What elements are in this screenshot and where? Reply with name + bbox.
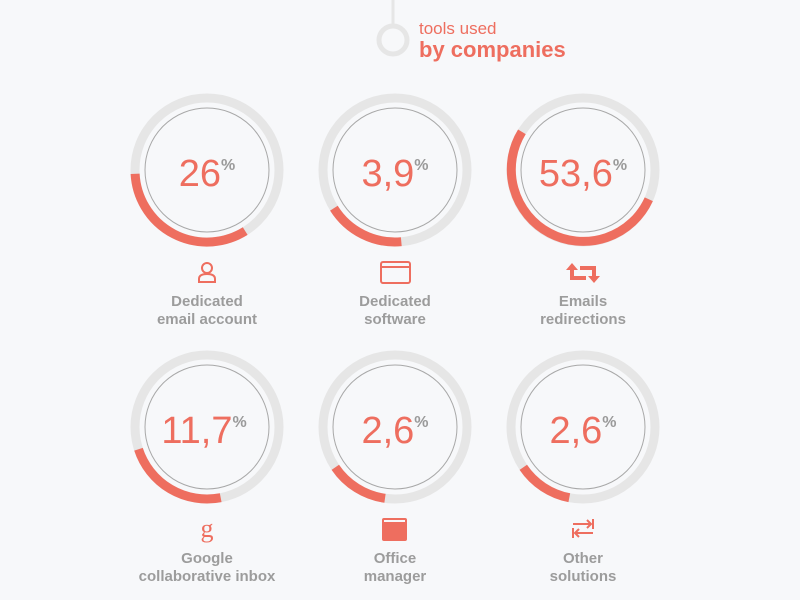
chart: dedicated software: [323, 98, 467, 328]
chart: office manager: %: [414, 414, 429, 431]
icon: retweet arrows: [566, 263, 600, 283]
icon: user: [199, 263, 215, 282]
title: by companies: [419, 37, 566, 62]
chart: other solutions: solutions: [550, 568, 616, 585]
chart: other solutions: Other: [563, 550, 603, 567]
title: [379, 0, 566, 62]
chart: dedicated email account: [135, 98, 279, 328]
chart: dedicated software: Dedicated: [359, 293, 431, 310]
chart: other solutions: %: [602, 414, 617, 431]
chart: dedicated software: 3,9: [361, 153, 414, 195]
chart: emails redirections: 53,6: [539, 153, 613, 195]
chart: google collaborative inbox: collaborative inbox: [139, 568, 276, 585]
icon: google g: g: [200, 514, 214, 543]
icon: filled window: [382, 518, 407, 541]
chart: office manager: 2,6: [361, 410, 414, 452]
chart: dedicated email account: 26: [179, 153, 221, 195]
chart: google collaborative inbox: 11,7: [161, 410, 232, 452]
chart: dedicated software: %: [414, 157, 429, 174]
chart: emails redirections: %: [613, 157, 627, 174]
chart: google collaborative inbox: Google: [181, 550, 233, 567]
icon: transfer arrows: [573, 519, 593, 538]
chart: office manager: manager: [364, 568, 426, 585]
chart: other solutions: 2,6: [549, 410, 602, 452]
chart: emails redirections: Emails: [559, 293, 607, 310]
chart: emails redirections: redirections: [540, 311, 626, 328]
chart: dedicated software: software: [364, 311, 426, 328]
chart: other solutions: [511, 355, 655, 585]
chart: dedicated email account: email account: [157, 311, 257, 328]
chart: emails redirections: [511, 98, 655, 328]
title: tools used: [419, 19, 496, 38]
chart: dedicated email account: Dedicated: [171, 293, 243, 310]
icon: window: [381, 262, 410, 283]
chart: google collaborative inbox: [135, 355, 279, 585]
chart: office manager: Office: [374, 550, 416, 567]
chart: google collaborative inbox: %: [232, 414, 247, 431]
chart: office manager: [323, 355, 467, 585]
chart: dedicated email account: %: [221, 157, 235, 174]
